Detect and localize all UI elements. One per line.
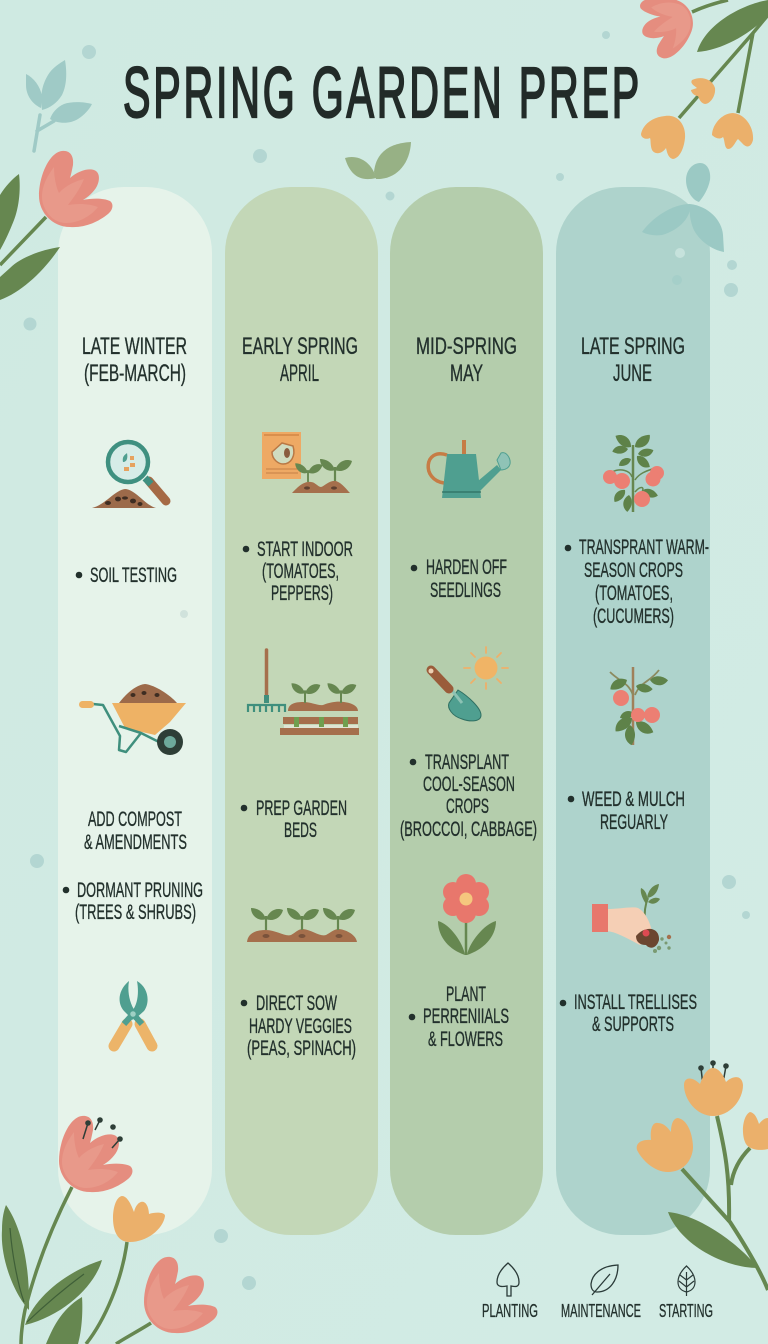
task: transplant cool-season: COOL-SEASON: [423, 773, 515, 796]
task: add compost: ADD COMPOST: [88, 808, 182, 831]
task: plant perennials: PERRENIIALS: [423, 1005, 509, 1028]
legend: starting: [659, 1266, 713, 1321]
heading: early spring: EARLY SPRING: [242, 333, 358, 360]
task: add compost: [84, 808, 187, 854]
icon: hand planting: [592, 884, 671, 953]
task: soil testing: SOIL TESTING: [90, 564, 177, 587]
decoration: centre leaves: [345, 142, 411, 179]
icon: flower: [438, 874, 496, 955]
heading: late winter: (FEB-MARCH): [84, 360, 186, 387]
legend: maintenance: MAINTENANCE: [561, 1301, 641, 1321]
task: transplant cool-season: [400, 751, 537, 841]
title: SPRING GARDEN PREP: [123, 53, 639, 133]
decoration: bottom-right flowers: [637, 1060, 768, 1290]
task: install trellises: & SUPPORTS: [592, 1013, 674, 1036]
task: start indoor: START INDOOR: [257, 538, 353, 561]
task: weed and mulch: [568, 788, 685, 834]
legend: planting: [482, 1263, 538, 1321]
icon: staked tomato: [609, 667, 668, 745]
panel: late winter: [58, 187, 212, 1235]
heading: mid-spring: [416, 333, 517, 387]
heading: early spring: [242, 333, 358, 387]
task: dormant pruning: DORMANT PRUNING: [77, 879, 203, 902]
task: dormant pruning: [63, 879, 203, 924]
task: plant perennials: [409, 983, 509, 1051]
task: transplant cool-season: (BROCCOI, CABBAGE): [400, 818, 537, 841]
task: transplant warm-season: (TOMATOES,: [595, 582, 673, 605]
task: prep garden beds: BEDS: [284, 819, 317, 842]
decoration: top-left sprig: [26, 60, 92, 151]
decoration: bottom-left flowers: [2, 1116, 217, 1344]
task: harden off: [411, 556, 507, 602]
heading: mid-spring: MAY: [450, 360, 483, 387]
icon: seed packet and sprouts: [262, 432, 352, 493]
task: start indoor: (TOMATOES,: [262, 560, 339, 583]
task: transplant cool-season: TRANSPLANT: [425, 751, 509, 774]
task: weed and mulch: WEED & MULCH: [582, 788, 685, 811]
task: weed and mulch: REGUARLY: [600, 811, 668, 834]
icon: soil test magnifier: [92, 442, 166, 508]
task: prep garden beds: [241, 797, 347, 842]
legend: maintenance: [561, 1265, 641, 1321]
icon: trowel and sun: [428, 647, 508, 721]
heading: late winter: [82, 333, 187, 387]
legend: [482, 1263, 713, 1321]
icon: wheelbarrow: [79, 684, 186, 755]
task: dormant pruning: (TREES & SHRUBS): [75, 901, 196, 924]
legend: planting: PLANTING: [482, 1301, 538, 1321]
panel: early spring: [225, 187, 378, 1235]
task: transplant warm-season: (CUCUMERS): [593, 605, 674, 628]
task: start indoor: [243, 538, 353, 605]
icon: tomato plant: [603, 431, 664, 512]
icon: watering can: [428, 440, 510, 498]
task: direct sow: HARDY VEGGIES: [249, 1015, 352, 1038]
heading: late spring: JUNE: [613, 360, 652, 387]
task: direct sow: [241, 992, 356, 1060]
heading: mid-spring: MID-SPRING: [416, 333, 517, 360]
panel: late spring: [556, 187, 710, 1235]
icon: pruning shears: [114, 981, 152, 1046]
task: prep garden beds: PREP GARDEN: [256, 797, 347, 820]
panel: mid-spring: [390, 187, 543, 1235]
decoration: left tulip: [0, 151, 112, 300]
decoration: top-right teal leaves: [642, 163, 724, 285]
icon: rake and garden beds: [248, 650, 359, 735]
heading: late winter: LATE WINTER: [82, 333, 187, 360]
task: install trellises: [560, 991, 697, 1036]
task: plant perennials: PLANT: [446, 983, 486, 1006]
task: transplant warm-season: SEASON CROPS: [584, 559, 683, 582]
heading: early spring: APRIL: [280, 360, 319, 387]
task: start indoor: PEPPERS): [271, 582, 333, 605]
decoration: top-right flowers: [626, 0, 768, 159]
task: soil testing: [76, 564, 177, 587]
task: direct sow: (PEAS, SPINACH): [247, 1037, 356, 1060]
legend: starting: STARTING: [659, 1301, 713, 1321]
task: direct sow: DIRECT SOW: [256, 992, 337, 1015]
heading: late spring: LATE SPRING: [581, 333, 685, 360]
task: harden off: HARDEN OFF: [426, 556, 507, 579]
task: harden off: SEEDLINGS: [430, 579, 501, 602]
task: transplant warm-season: [565, 536, 709, 628]
task: plant perennials: & FLOWERS: [428, 1028, 503, 1051]
icon: sprout row: [247, 908, 357, 942]
task: transplant cool-season: CROPS: [446, 795, 489, 818]
task: add compost: & AMENDMENTS: [84, 831, 187, 854]
heading: late spring: [581, 333, 685, 387]
